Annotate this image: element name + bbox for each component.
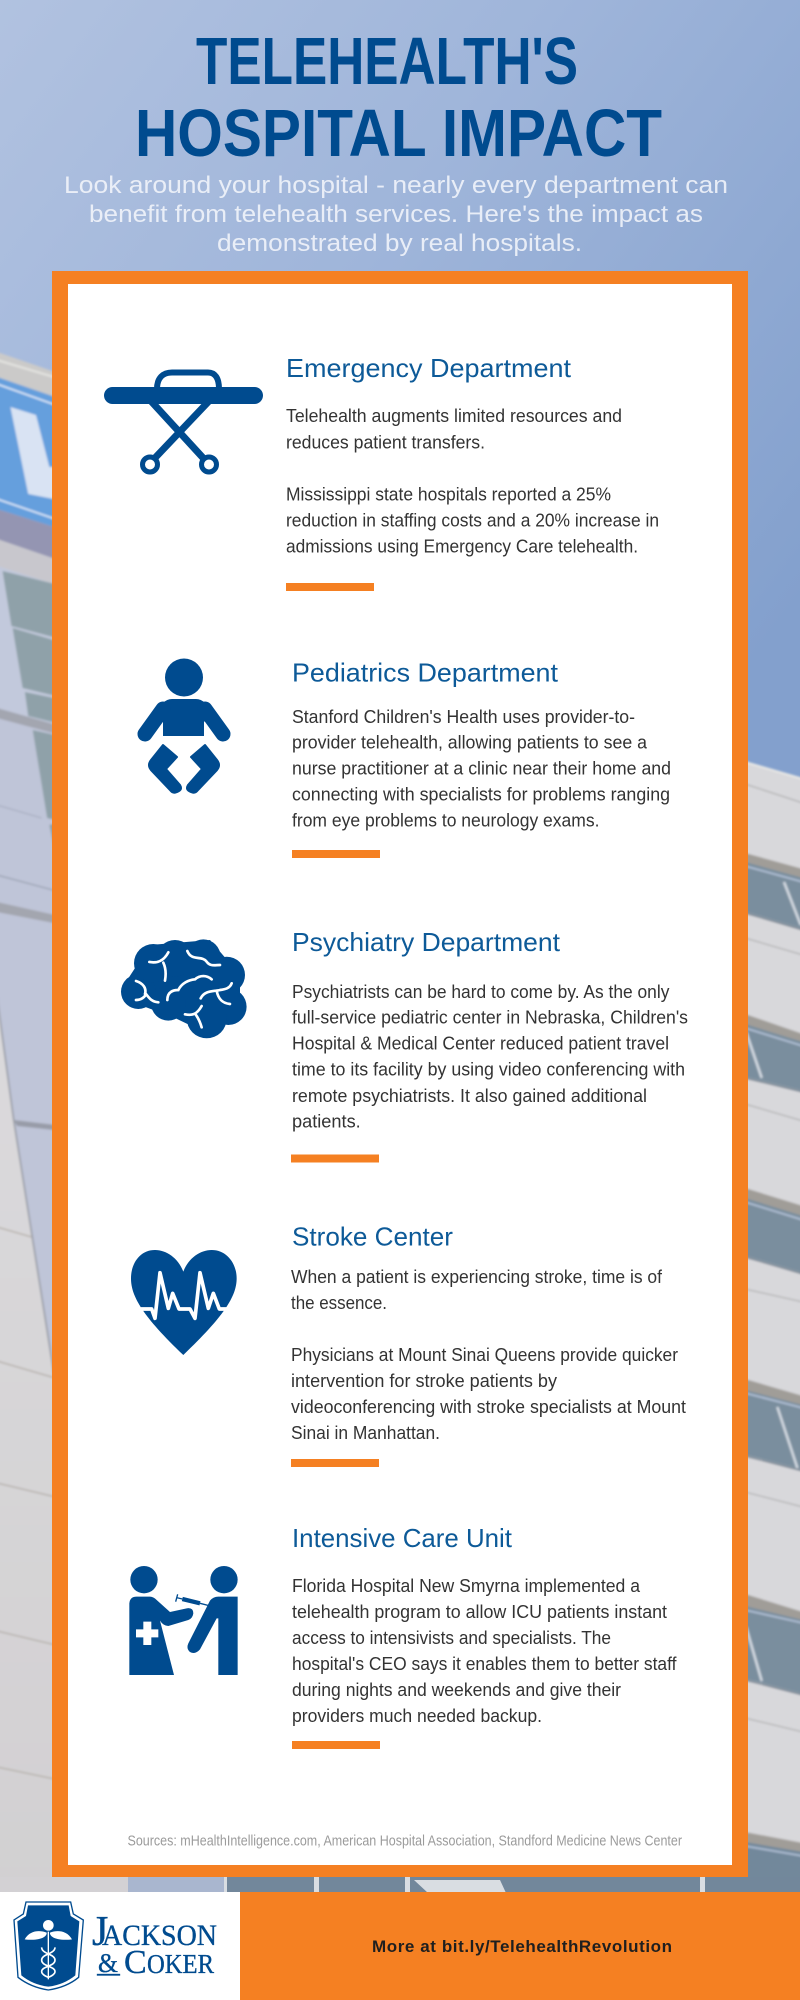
heading: stroke center: Stroke Center	[292, 1222, 453, 1252]
icon: baby	[145, 658, 223, 793]
text: psychiatry department body: patients.	[292, 1112, 361, 1132]
text: emergency department body: reduces patient transfers.	[286, 432, 485, 452]
text: intensive care unit body: during nights and weekends and give their	[292, 1680, 621, 1700]
logo wordmark: Jackson & Coker	[92, 1909, 217, 1981]
text: intensive care unit body: Florida Hospital New Smyrna implemented a	[292, 1576, 641, 1596]
logo wordmark: Jackson & Coker: OKER	[147, 1949, 214, 1979]
text: intensive care unit body	[292, 1576, 677, 1726]
text: stroke center body: Physicians at Mount Sinai Queens provide quicker	[291, 1345, 678, 1365]
icon: shield with caduceus	[14, 1902, 83, 1990]
footer: orange call to action: More at bit.ly/TelehealthRevolution	[372, 1937, 672, 1956]
text: stroke center body: the essence.	[291, 1293, 387, 1313]
text: stroke center body: When a patient is experiencing stroke, time is of	[291, 1267, 663, 1287]
logo wordmark: Jackson & Coker: &	[98, 1948, 118, 1978]
section: stroke center	[131, 1222, 686, 1467]
background: strip of windows below panel	[0, 1877, 800, 1893]
text: emergency department body: Mississippi state hospitals reported a 25%	[286, 484, 611, 504]
text: psychiatry department body: time to its facility by using video conferencing with	[292, 1059, 685, 1079]
icon: heart with pulse	[131, 1250, 237, 1355]
divider bar	[292, 1741, 380, 1749]
background: left building with hospital sign	[0, 352, 64, 1900]
text: psychiatry department body: remote psychiatrists. It also gained additional	[292, 1086, 647, 1106]
text: emergency department body: admissions using Emergency Care telehealth.	[286, 536, 638, 556]
text: pediatrics department body: from eye problems to neurology exams.	[292, 810, 600, 830]
section: intensive care unit	[129, 1523, 677, 1749]
text: stroke center body: intervention for stroke patients by	[291, 1371, 557, 1391]
text: psychiatry department body: Psychiatrists can be hard to come by. As the only	[292, 982, 669, 1002]
subtitle: benefit from telehealth services. Here's the impact as	[89, 201, 703, 228]
background: right building with windows	[745, 762, 800, 1900]
text: pediatrics department body: provider telehealth, allowing patients to see a	[292, 733, 648, 753]
text: emergency department body	[286, 406, 659, 556]
subtitle: demonstrated by real hospitals.	[217, 230, 582, 257]
text: intensive care unit body: providers much needed backup.	[292, 1706, 542, 1726]
logo wordmark: Jackson & Coker: J	[92, 1909, 108, 1955]
sources note: Sources: mHealthIntelligence.com, American Hospital Association, Standford Medicine News Center	[128, 1834, 682, 1850]
heading: emergency department: Emergency Department	[286, 353, 572, 383]
divider bar	[291, 1154, 379, 1162]
icon: stretcher	[104, 372, 263, 472]
section: pediatrics department	[145, 658, 671, 858]
title	[135, 24, 662, 171]
text: intensive care unit body: hospital's CEO says it enables them to better staff	[292, 1654, 677, 1674]
heading: pediatrics department: Pediatrics Department	[292, 658, 559, 688]
title: TELEHEALTH'S	[196, 24, 578, 99]
icon: doctor giving injection	[129, 1566, 238, 1675]
title: HOSPITAL IMPACT	[135, 96, 662, 171]
heading: intensive care unit: Intensive Care Unit	[292, 1523, 513, 1553]
text: intensive care unit body: access to intensivists and specialists. The	[292, 1628, 611, 1648]
text: emergency department body: Telehealth augments limited resources and	[286, 406, 622, 426]
text: stroke center body: videoconferencing with stroke specialists at Mount	[291, 1397, 686, 1417]
subtitle	[64, 172, 728, 257]
text: emergency department body: reduction in staffing costs and a 20% increase in	[286, 510, 659, 530]
text: pediatrics department body	[292, 707, 671, 830]
section: emergency department	[104, 353, 659, 591]
logo wordmark: Jackson & Coker: ACKSON	[102, 1919, 217, 1952]
logo wordmark: Jackson & Coker: C	[124, 1944, 147, 1981]
panel: orange frame with white content card	[52, 271, 748, 1877]
subtitle: Look around your hospital - nearly every department can	[64, 172, 728, 199]
text: psychiatry department body: Hospital & Medical Center reduced patient travel	[292, 1034, 669, 1054]
heading: psychiatry department: Psychiatry Department	[292, 927, 561, 957]
section: psychiatry department	[121, 927, 688, 1162]
text: psychiatry department body	[292, 982, 688, 1132]
icon: brain	[121, 939, 247, 1038]
text: pediatrics department body: nurse practitioner at a clinic near their home and	[292, 759, 671, 779]
text: pediatrics department body: Stanford Children's Health uses provider-to-	[292, 707, 635, 727]
text: intensive care unit body: telehealth program to allow ICU patients instant	[292, 1602, 667, 1622]
text: stroke center body	[291, 1267, 686, 1443]
footer: orange call to action	[240, 1892, 800, 2000]
text: stroke center body: Sinai in Manhattan.	[291, 1423, 440, 1443]
divider bar	[286, 583, 374, 591]
text: psychiatry department body: full-service pediatric center in Nebraska, Children's	[292, 1008, 688, 1028]
divider bar	[292, 850, 380, 858]
divider bar	[291, 1459, 379, 1467]
footer: white logo block	[0, 1892, 240, 2000]
text: pediatrics department body: connecting with specialists for problems ranging	[292, 784, 670, 804]
